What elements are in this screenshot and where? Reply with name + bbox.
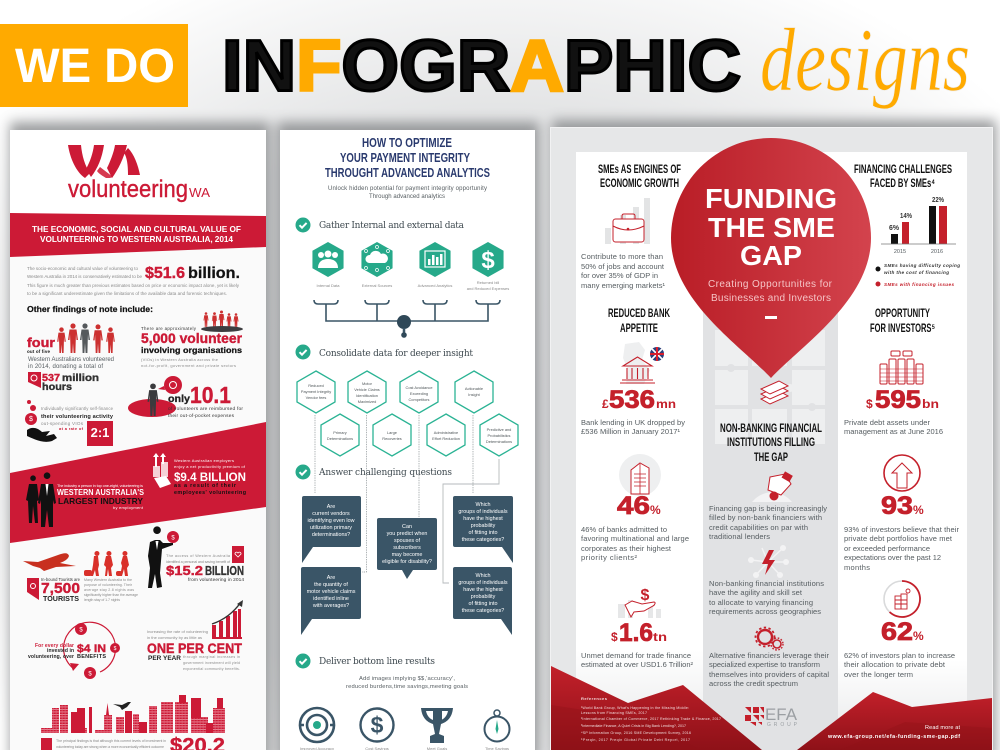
bubble: question a	[302, 496, 361, 563]
hexagons: insights: Probabilistics	[488, 433, 511, 438]
hexagons: insights: Determinations	[486, 439, 512, 444]
references	[581, 696, 721, 742]
section: non-banking financial institutions	[709, 421, 830, 688]
banner: report title: VOLUNTEERING TO WESTERN AUSTRALIA, 2014	[40, 234, 233, 244]
bubble: question d: of fitting into	[468, 530, 498, 536]
section: SMEs as engines: many emerging markets¹	[581, 281, 666, 290]
stat: four out of five: Western Australians volunteered	[28, 357, 114, 363]
section: 62 percent: 62	[881, 618, 913, 646]
diagram: funnel tree	[314, 300, 500, 338]
banner: report title	[10, 213, 266, 257]
bubble: question d: Which	[476, 502, 490, 508]
references: ¹World Bank Group, What's Happening in the Missing Middle:	[581, 706, 689, 710]
bubble: question c: may become	[392, 552, 422, 558]
hexagons: insights: Identification	[356, 393, 378, 398]
icon: advanced analytics	[419, 242, 451, 277]
references: References	[581, 696, 608, 701]
section: 1.6 trillion	[581, 587, 694, 669]
icon: internal data	[312, 242, 344, 277]
stat: 15.2 billion: $15.2	[166, 563, 203, 578]
logo: volunteering WA	[68, 145, 210, 203]
section: opportunity: 595	[875, 386, 921, 414]
bubble: question e: have the highest	[463, 587, 503, 593]
section: SMEs as engines: 50% of jobs and account	[581, 262, 665, 271]
stat: 5,000 volunteer organisations: involving organisations	[141, 345, 242, 355]
panel: funding the SME gap	[550, 127, 993, 750]
section: SMEs as engines	[581, 162, 681, 290]
section: opportunity: management as at June 2016	[844, 427, 943, 436]
text: results note: Add images implying $$,'accuracy',	[359, 676, 455, 682]
bar chart: financing: 2016	[931, 249, 943, 255]
icon: accuracy target	[300, 708, 334, 742]
section: non-banking financial institutions: Alternative financiers leverage their	[709, 651, 830, 660]
logo: EFA group: GROUP	[767, 722, 798, 728]
section: 93 percent	[844, 455, 960, 572]
stat: 15.2 billion	[148, 526, 244, 588]
references: Lessons from Financing SMEs, 2017	[581, 711, 647, 715]
section: non-banking financial institutions: have the agility and skill set	[709, 588, 803, 597]
hexagons: insights: Administrative	[434, 430, 458, 435]
step 2: consolidate: Consolidate data for deeper insight	[319, 349, 473, 359]
section: non-banking financial institutions: THE GAP	[754, 450, 788, 464]
stat: 20.2	[41, 735, 225, 750]
labels: data sources: Returned bill	[477, 280, 499, 285]
bubble: question e: these categories?	[462, 608, 504, 614]
icon: plant hand	[752, 471, 793, 502]
section: non-banking financial institutions: traditional lenders	[709, 532, 770, 541]
cycle: 4 dollars in benefits: $	[114, 646, 117, 652]
labels: data sources: External Sources	[362, 283, 392, 288]
stat: four out of five: 537	[42, 373, 60, 384]
section: 62 percent: their allocation to private debt	[844, 660, 946, 669]
bubble: question d	[453, 496, 513, 563]
section: reduced bank appetite	[581, 306, 685, 436]
pin: funding the SME gap: THE SME	[708, 212, 835, 243]
hexagons: insights: Vehicle Claims	[354, 387, 380, 392]
stat: four out of five: in 2014, donating a total of	[28, 364, 103, 370]
cycle: 4 dollars in benefits	[28, 622, 120, 679]
band: largest industry: by employment	[113, 505, 144, 510]
section: SMEs as engines: ECONOMIC GROWTH	[600, 176, 679, 190]
hexagons: insights: Determinations	[327, 436, 353, 441]
bar chart: financing: 2015	[894, 249, 906, 255]
panel: volunteering WA	[10, 130, 266, 750]
section: 62 percent: %	[913, 629, 924, 643]
icon: external sources	[361, 242, 393, 277]
cycle: 4 dollars in benefits: $	[88, 672, 92, 678]
hexagons: insights: Actionable	[465, 386, 483, 391]
banner: we do	[0, 24, 188, 107]
bubble: question d: these categories?	[462, 537, 504, 543]
section: non-banking financial institutions: themselves into providers of capital	[709, 670, 829, 679]
section: non-banking financial institutions: specialized expertise to transform	[709, 660, 820, 669]
text: total value: This figure is much greater than previous estimates based on price or economic impact alone, yet is likely	[27, 283, 240, 288]
labels: data sources	[317, 280, 509, 291]
section: 46 percent: corporates as their highest	[581, 544, 672, 553]
step 1: gather data	[296, 218, 509, 338]
hexagons: insights: Predictive and	[487, 427, 511, 432]
stat: 20.2: volunteering today are strong when a more economically efficient outcome	[56, 745, 164, 749]
stat: 7,500 tourists: length stay of 1.7 nights	[84, 598, 120, 602]
text: total value: Western Australia in 2014 is conservatively estimated to be	[27, 274, 142, 279]
section: 46 percent: 46	[617, 492, 650, 520]
band: largest industry: WESTERN AUSTRALIA'S	[57, 488, 145, 497]
chart: one per cent: government investment will yield	[183, 661, 240, 665]
stat: 5,000 volunteer organisations: There are approximately	[141, 326, 197, 331]
icon: money stack	[761, 381, 788, 404]
chart: one per cent: exponential community benefits.	[183, 667, 240, 671]
pin: funding the SME gap: Businesses and Investors	[711, 293, 831, 304]
hexagons: insights: Reduced	[308, 383, 324, 388]
section: opportunity: OPPORTUNITY	[875, 306, 930, 320]
section: reduced bank appetite: £	[602, 397, 609, 411]
section: non-banking financial institutions: INSTITUTIONS FILLING	[727, 435, 815, 449]
logo: volunteering WA: WA	[189, 185, 210, 200]
link: read more: www.efa-group.net/efa-funding-sme-gap.pdf	[827, 734, 960, 740]
section: 93 percent: 93% of investors believe that their	[844, 525, 960, 534]
step 4: results: Deliver bottom line results	[319, 657, 435, 667]
legend: financing: SMEs with financing issues	[884, 282, 954, 287]
step 3: questions: Answer challenging questions	[318, 468, 452, 478]
pin: funding the SME gap	[671, 138, 871, 378]
legend: financing: SMEs having difficulty coping	[884, 263, 960, 268]
hexagons: insights: Payment Integrity	[301, 389, 331, 394]
bubble: question c: Can	[402, 524, 412, 530]
band: largest industry	[10, 422, 266, 543]
stat: 5,000 volunteer organisations: not-for-profit, government and private sectors	[141, 363, 236, 368]
band: largest industry: The industry a person in top one-eight, volunteering is	[57, 483, 143, 488]
icon: dollar: $	[481, 247, 495, 274]
band: largest industry: employees' volunteering	[174, 490, 246, 496]
banner: we do: WE DO	[15, 40, 175, 93]
labels: results	[300, 746, 509, 750]
stat: four out of five: hours	[42, 382, 72, 393]
stat: 7,500 tourists: 7,500	[41, 580, 80, 597]
labels: data sources: Advanced Analytics	[418, 283, 452, 288]
icon: stopwatch	[484, 710, 510, 742]
step 1: gather data: Gather Internal and external data	[319, 221, 465, 231]
section: non-banking financial institutions: Non-banking financial institutions	[709, 579, 824, 588]
chart: one per cent: through marginal increases in	[183, 655, 240, 659]
stat: only 10.1: only	[168, 394, 190, 405]
bubble: question e: of fitting into	[468, 601, 498, 607]
section: 46 percent	[581, 454, 689, 562]
step 3: questions	[296, 464, 513, 635]
hexagons: insights: Large	[387, 430, 397, 435]
hexagons: insights: Recoveries	[382, 436, 402, 441]
bar chart: financing	[881, 197, 956, 255]
section: 1.6 trillion: Unmet demand for trade finance	[581, 651, 691, 660]
band: largest industry: enjoy a net productivity premium of	[174, 464, 246, 469]
section: opportunity: FOR INVESTORS⁵	[870, 321, 935, 335]
cycle: 4 dollars in benefits: For every dollar	[35, 643, 74, 649]
chart: one per cent: ONE PER CENT	[147, 640, 242, 656]
stat: only 10.1: of volunteers are reimbursed for	[168, 406, 243, 412]
stat: 2 to 1: out-spending VIOs	[41, 421, 84, 426]
stat: 15.2 billion: The access of Western Australia	[166, 554, 231, 558]
bubble: question a: determinations?	[312, 532, 350, 538]
cycle: 4 dollars in benefits: BENEFITS	[77, 654, 106, 660]
section: 1.6 trillion: 1.6	[619, 619, 653, 647]
logo: EFA group	[745, 705, 798, 728]
bubble: question c: spouses of	[394, 538, 421, 544]
hexagons: insights: Competitors	[409, 397, 430, 402]
puzzle background	[715, 330, 825, 444]
heading: infographic: INFOGRAPHIC	[222, 26, 741, 106]
chart: one per cent	[147, 600, 243, 671]
section: 93 percent: expectations over the past 12	[844, 553, 941, 562]
section: non-banking financial institutions: filled by non-bank financiers with	[709, 513, 822, 522]
pin: funding the SME gap: GAP	[740, 240, 802, 271]
section: 93 percent: 93	[881, 492, 913, 520]
stat: four out of five: four	[27, 335, 55, 350]
icon: gears	[756, 628, 783, 650]
cycle: 4 dollars in benefits: invested in	[47, 648, 74, 654]
text: results note: reduced burdens,time savings,meeting goals	[346, 684, 468, 690]
section: 93 percent: %	[913, 503, 924, 517]
bubble: question a: current vendors	[312, 511, 350, 517]
stat: four out of five	[27, 323, 115, 393]
section: 93 percent: private debt portfolios have met	[844, 534, 953, 543]
section: SMEs as engines: SMEs AS ENGINES OF	[598, 162, 681, 176]
section: reduced bank appetite: REDUCED BANK	[608, 306, 670, 320]
section: 46 percent: %	[650, 503, 661, 517]
section: reduced bank appetite: mn	[656, 397, 676, 411]
chart: one per cent: in the community by as little as	[147, 635, 202, 640]
section: financing challenges	[854, 162, 960, 287]
bar chart: financing: 14%	[900, 213, 913, 220]
hexagons: insights: Vendor fees	[306, 395, 326, 400]
icon: dollar	[472, 242, 504, 277]
hexagons: insights: Motor	[362, 381, 373, 386]
section: 1.6 trillion: $	[641, 587, 650, 604]
logo: volunteering WA: volunteering	[68, 176, 188, 203]
band: largest industry: $9.4 BILLION	[174, 470, 246, 484]
stat: 7,500 tourists: In-bound Tourists are	[41, 577, 81, 582]
pin: funding the SME gap: Creating Opportunities for	[708, 279, 833, 290]
section: non-banking financial institutions: across the credit spectrum	[709, 679, 798, 688]
section: 1.6 trillion: estimated at over USD1.6 Trillion²	[581, 660, 694, 669]
bar chart: financing: 22%	[932, 197, 945, 204]
stat: 2 to 1: 2:1	[91, 425, 109, 440]
icon: cost savings	[360, 708, 394, 742]
stat: 20.2: The principal findings is that although this current levels of investment in	[56, 739, 166, 743]
illustration: city skyline	[41, 695, 225, 733]
section: 46 percent: 46% of banks admitted to	[581, 525, 667, 534]
text: total value: billion.	[188, 265, 240, 282]
heading: how to optimize: YOUR PAYMENT INTEGRITY	[340, 151, 471, 165]
bar chart: financing: 6%	[889, 225, 900, 232]
text: total value: $51.6	[145, 265, 185, 282]
text: intro: Through advanced analytics	[369, 194, 445, 200]
stat: 5,000 volunteer organisations: 5,000 volunteer	[141, 330, 243, 346]
heading: how to optimize	[325, 136, 490, 180]
bubble: question b	[301, 567, 361, 635]
bubble: question d: have the highest	[463, 516, 503, 522]
chart: one per cent: Increasing the rate of volunteering	[147, 629, 208, 634]
labels: data sources: and Reduced Expenses	[467, 286, 509, 291]
bubble: question c: you predict when	[387, 531, 427, 537]
footer shape: right	[797, 692, 992, 750]
legend: financing	[876, 263, 960, 287]
hexagons: insights: Effort Reduction	[432, 436, 460, 441]
stat: 7,500 tourists: Many Western Australia to the	[84, 578, 132, 582]
text: total value: The socio-economic and cultural value of volunteering to	[27, 266, 138, 271]
references: ³Intermediate Finance, A Quiet Crisis in Big Bank Lending?, 2017	[581, 724, 686, 728]
bubble: question e	[453, 567, 512, 635]
stat: four out of five: million	[62, 373, 99, 384]
section: opportunity	[844, 306, 943, 436]
text: total value	[27, 265, 240, 296]
step 2: consolidate	[296, 344, 518, 456]
section: SMEs as engines: Contribute to more than	[581, 252, 663, 261]
bubble: question a: utilization primary	[310, 525, 352, 531]
stat: 7,500 tourists: purpose of volunteering. Their	[84, 583, 133, 587]
bubble: question e: Which	[476, 573, 490, 579]
bubble: question b: motor vehicle claims	[307, 589, 356, 595]
banner: report title: THE ECONOMIC, SOCIAL AND CULTURAL VALUE OF	[32, 224, 241, 234]
bubble: question d: probability	[471, 523, 496, 529]
stat: only 10.1	[128, 376, 243, 419]
references: ⁴SP Information Group, 2016 SME Development Survey, 2016	[581, 731, 691, 735]
section: SMEs as engines: for over 35% of GDP in	[581, 271, 658, 280]
stat: 7,500 tourists: average stay 2.8 nights was	[84, 588, 134, 592]
heading: other findings: Other findings of note include:	[27, 304, 153, 314]
stat: 2 to 1	[25, 400, 114, 446]
stat: 7,500 tourists	[23, 551, 138, 603]
heading: how to optimize: HOW TO OPTIMIZE	[362, 136, 452, 150]
stat: four out of five: out of five	[27, 349, 50, 354]
section: reduced bank appetite: APPETITE	[620, 321, 658, 335]
section: 93 percent: or exceeded performance	[844, 544, 930, 553]
section: financing challenges: FACED BY SMEs⁴	[870, 176, 935, 190]
icon: cost savings: $	[371, 712, 384, 738]
step 4: results	[296, 654, 510, 750]
section: reduced bank appetite: £536 Million in January 2017¹	[581, 427, 680, 436]
labels: data sources: Internal Data	[317, 283, 340, 288]
stat: only 10.1: their out-of-pocket expenses	[168, 413, 235, 419]
hexagons: insights: Cost Avoidance	[406, 385, 432, 390]
stat: 7,500 tourists: significantly higher than the average	[84, 593, 138, 597]
bubble: question d: groups of individuals	[458, 509, 508, 515]
text: intro	[328, 186, 487, 200]
stat: only 10.1: 10.1	[190, 382, 231, 408]
chart: one per cent: PER YEAR	[148, 656, 182, 662]
bubble: question e: probability	[471, 594, 496, 600]
bubble: question b: the quantity of	[314, 582, 348, 588]
hexagons: insights: Exceeding	[410, 391, 428, 396]
stat: 5,000 volunteer organisations: (VIOs) in Western Australia across the	[141, 357, 219, 362]
references: ²International Chamber of Commerce, 2017 Rethinking Trade & Finance, 2017	[581, 717, 721, 721]
section: non-banking financial institutions: NON-BANKING FINANCIAL	[720, 421, 822, 435]
section: reduced bank appetite: Bank lending in UK dropped by	[581, 418, 685, 427]
section: 1.6 trillion: tn	[653, 630, 667, 644]
section: non-banking financial institutions: requirements across geographies	[709, 607, 821, 616]
hexagons: insights: Maximized	[358, 399, 376, 404]
hexagons: insights	[297, 371, 518, 456]
connectors: dotted arrows	[315, 415, 499, 583]
cycle: 4 dollars in benefits: volunteering, over	[28, 654, 74, 660]
section: reduced bank appetite: 536	[609, 386, 655, 414]
bubble: question e: groups of individuals	[458, 580, 508, 586]
cycle: 4 dollars in benefits: $	[79, 628, 83, 634]
bubble: question b: with averages?	[312, 603, 349, 609]
references: ⁵Preqin, 2017 Preqin Global Private Debt Report, 2017	[581, 738, 690, 742]
link: read more: Read more at	[925, 725, 960, 731]
bubble: question a: identifying even low	[307, 518, 355, 524]
text: results note	[346, 676, 468, 690]
stat: 2 to 1: at a rate of	[59, 426, 84, 431]
section: opportunity: bn	[922, 397, 939, 411]
bubble: question a: Are	[327, 504, 335, 510]
stat: 15.2 billion: from volunteering in 2014	[188, 577, 244, 583]
band: largest industry: LARGEST INDUSTRY	[58, 496, 143, 506]
bubble: question b: Are	[327, 575, 335, 581]
text: intro: Unlock hidden potential for payment integrity opportunity	[328, 186, 487, 192]
section: non-banking financial institutions: credit capabilities on par with	[709, 523, 808, 532]
section: 46 percent: favoring multinational and large	[581, 534, 689, 543]
section: non-banking financial institutions: to allocate to varying financing	[709, 598, 813, 607]
bubble: question c	[377, 518, 437, 579]
section: 46 percent: priority clients²	[581, 553, 638, 562]
section: opportunity: $	[866, 397, 873, 411]
stat: 15.2 billion: BILLION	[205, 563, 244, 578]
section: non-banking financial institutions: Financing gap is being increasingly	[709, 504, 827, 513]
legend: financing: with the cost of financing	[884, 270, 949, 275]
section: 62 percent: over the longer term	[844, 670, 913, 679]
panel: payment integrity	[280, 130, 535, 750]
band: largest industry: as a result of their	[174, 483, 237, 489]
hexagons: insights: Primary	[333, 430, 347, 435]
stat: 7,500 tourists: TOURISTS	[43, 594, 79, 603]
logo: EFA group: EFA	[765, 705, 798, 724]
bubble: question c: subscribers	[393, 545, 421, 551]
footer shape: left	[551, 666, 762, 750]
section: 62 percent: 62% of investors plan to increase	[844, 651, 955, 660]
section: 62 percent	[844, 581, 955, 679]
stat: 15.2 billion: $	[171, 536, 175, 542]
bubble: question c: eligible for disability?	[382, 559, 432, 565]
bubble: question b: identified inline	[313, 596, 349, 602]
band: largest industry: Western Australian employers	[174, 458, 234, 463]
pin: funding the SME gap: FUNDING	[705, 183, 837, 214]
stat: 2 to 1: their volunteering activity	[41, 414, 114, 420]
stat: 2 to 1: $	[29, 416, 33, 423]
stat: 15.2 billion: identified a personal and saving benefit of	[166, 560, 231, 564]
link: read more	[827, 725, 960, 740]
icon: trophy	[421, 708, 453, 743]
stat: 5,000 volunteer organisations	[141, 310, 243, 368]
section: opportunity: Private debt assets under	[844, 418, 930, 427]
section: 93 percent: months	[844, 563, 870, 572]
stat: 2 to 1: Individually significantly self-finance	[41, 406, 114, 411]
icon: lightning network	[748, 545, 789, 578]
heading: how to optimize: THROUGHT ADVANCED ANALYTICS	[325, 166, 490, 180]
section: 1.6 trillion: $	[611, 630, 618, 644]
text: total value: to be a significant underestimate given the limitations of the available data and forensic techniques.	[27, 291, 227, 296]
hexagons: insights: Insight	[468, 392, 481, 397]
cycle: 4 dollars in benefits: $4 IN	[77, 643, 106, 655]
